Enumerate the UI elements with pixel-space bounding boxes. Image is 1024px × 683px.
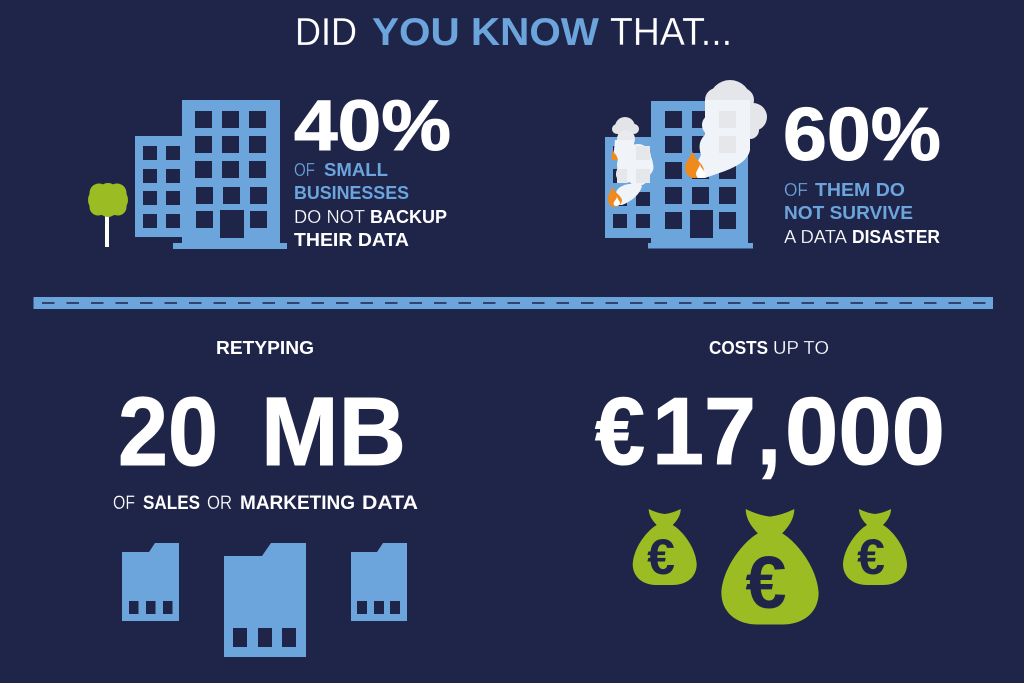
text: of small businesses do not backup their data: DO NOT [294,206,365,227]
text: of small businesses do not backup their data [294,159,447,250]
big number 60%: 60% [783,92,941,176]
heading: costs up to [709,337,829,358]
big number 17,000 euro [595,378,945,485]
icon: money bag left [633,509,697,585]
icon: small smoke cloud [612,117,654,205]
icon: memory card centre [224,543,306,657]
icon: flames [608,150,705,207]
icon: large smoke cloud [697,80,767,178]
icon: burning building [605,80,767,248]
icon: money bag left: € [647,529,675,585]
big number 17,000 euro: , [757,378,781,485]
big number 20 MB: MB [261,377,406,486]
text: of them do not survive a data disaster: A DATA [784,226,848,247]
icon: tree [88,183,128,247]
panel: 60 percent [605,80,941,248]
big number 20 MB [118,377,406,486]
title: DID [295,11,357,54]
panel: costs up to 17,000 euro [595,337,945,625]
big number 40%: 40% [294,87,451,166]
text: of sales or marketing data: MARKETING [240,492,355,514]
text: of them do not survive a data disaster: DISASTER [852,226,940,247]
big number 17,000 euro: 17 [652,378,756,485]
heading: retyping: RETYPING [216,337,314,358]
text: of small businesses do not backup their data: SMALL [324,159,388,180]
icon: money bag right [843,509,907,585]
title: THAT... [610,11,732,54]
text: of them do not survive a data disaster: THEM DO [815,179,905,200]
icon: memory card right [351,543,407,621]
text: of them do not survive a data disaster [784,179,940,247]
title [295,11,732,54]
icon: money bag centre: € [745,541,787,624]
text: of small businesses do not backup their data: THEIR DATA [294,229,409,250]
text: of sales or marketing data: OR [207,492,232,514]
icon: money bag right: € [857,529,885,585]
title: YOU KNOW [372,11,599,54]
panel: retyping 20 MB [113,337,418,657]
big number 17,000 euro: € [595,378,645,485]
divider [34,297,993,309]
text: of small businesses do not backup their data: OF [294,159,315,180]
big number 17,000 euro: 000 [785,378,945,485]
heading: costs up to: UP TO [773,337,829,358]
icon: memory card left [122,543,179,621]
heading: costs up to: COSTS [709,337,768,358]
text: of sales or marketing data: SALES [143,492,200,514]
text: of them do not survive a data disaster: NOT SURVIVE [784,202,913,223]
icon: office building [135,100,287,249]
text: of them do not survive a data disaster: OF [784,179,808,200]
text: of small businesses do not backup their data: BUSINESSES [294,182,409,203]
icon: money bag centre [721,509,819,625]
text: of sales or marketing data: OF [113,492,135,514]
text: of sales or marketing data: DATA [362,492,418,514]
big number 20 MB: 20 [118,377,218,486]
text: of sales or marketing data [113,492,418,514]
text: of small businesses do not backup their data: BACKUP [370,206,447,227]
panel: 40 percent [88,87,451,250]
